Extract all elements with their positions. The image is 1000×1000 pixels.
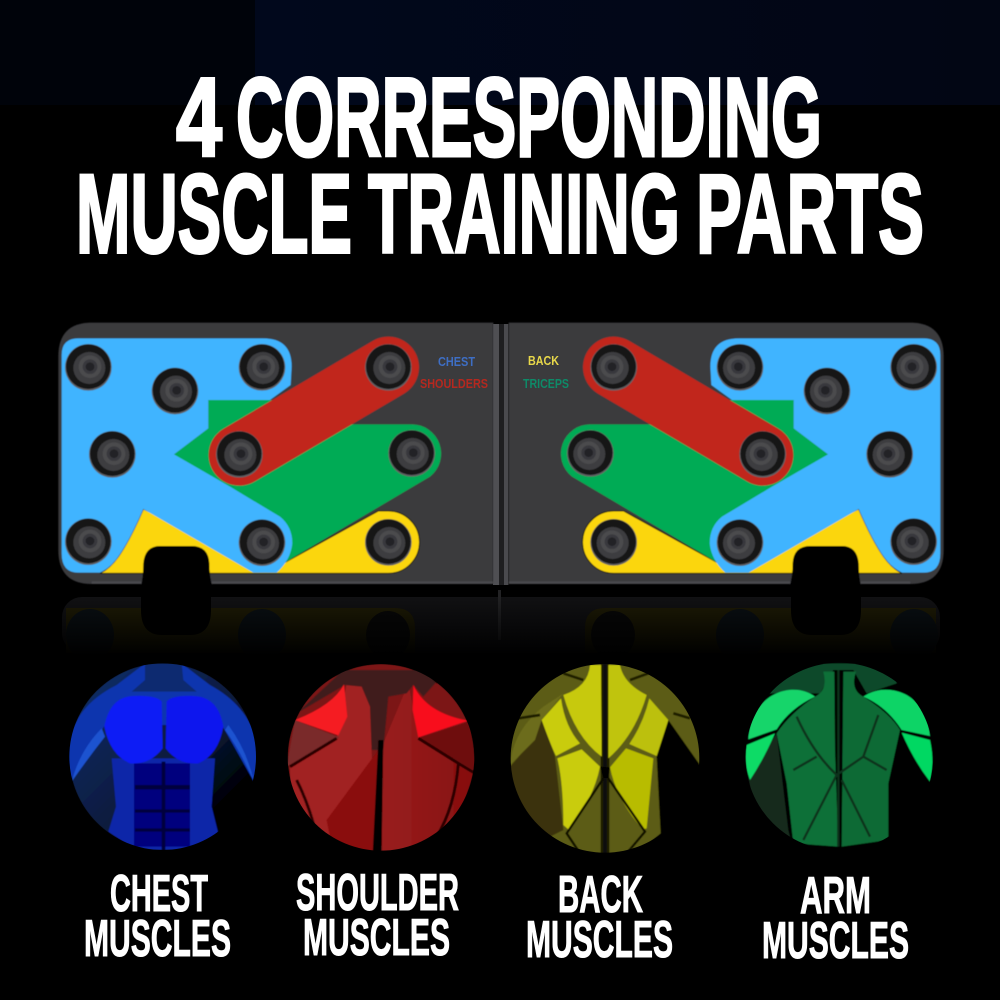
icon: back muscles [510,664,700,853]
board: left half [58,323,493,587]
label: back muscles [526,866,673,969]
label: chest muscles [84,865,231,968]
icon: shoulder muscles [287,664,480,853]
push-up board [58,323,944,587]
top navy band [0,0,1000,105]
label: arm muscles [762,867,909,970]
label: chest muscles: MUSCLES [84,910,231,968]
board label: chest: CHEST [438,354,475,369]
title [76,55,924,276]
title: 4 [176,55,222,180]
board: right half [509,323,944,587]
icon: chest muscles [67,663,258,850]
label: back muscles: BACK [558,866,643,924]
board label: triceps: TRICEPS [523,376,569,391]
label: back muscles: MUSCLES [526,911,673,969]
label: shoulder muscles [296,864,459,967]
board reflection [50,590,950,662]
board label: back: BACK [528,353,559,368]
title: MUSCLE [76,152,352,276]
label: shoulder muscles: SHOULDER [296,864,459,922]
icon: arm muscles [745,663,933,851]
board: hinge [493,324,509,585]
label: shoulder muscles: MUSCLES [303,909,450,967]
label: arm muscles: ARM [800,867,871,925]
title: TRAINING [368,152,680,276]
board label: shoulders: SHOULDERS [420,376,488,391]
label: chest muscles: CHEST [110,865,208,923]
